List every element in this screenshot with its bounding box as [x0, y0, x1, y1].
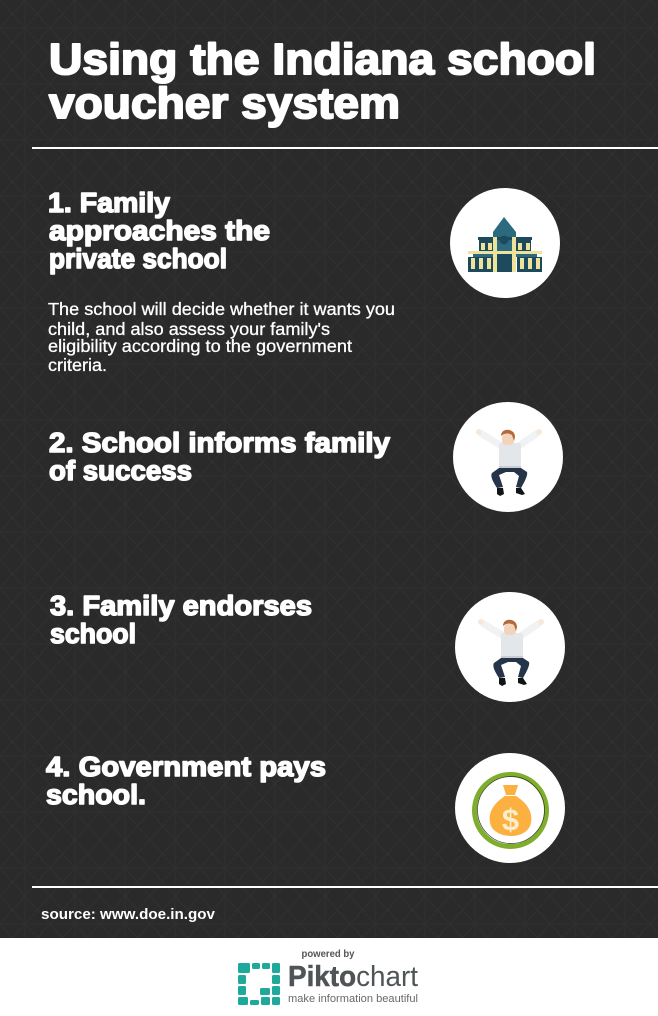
icon: money bag: $ [502, 802, 519, 837]
source: source: www.doe.in.gov [41, 906, 216, 923]
step 2 heading: 2. School informs family [49, 427, 390, 458]
step 1 heading: approaches the [49, 215, 270, 246]
icon: Piktochart logo [238, 963, 280, 1005]
step 1 body text: The school will decide whether it wants you [48, 299, 395, 319]
step 4 heading [46, 751, 326, 810]
icon: cheering person [455, 592, 565, 702]
icon: money bag [455, 753, 565, 863]
icon: cheering person [453, 402, 563, 512]
wordmark: Piktochart [288, 961, 418, 993]
top divider [32, 147, 658, 149]
title: voucher system [49, 79, 400, 128]
bottom divider [32, 886, 658, 888]
step 3 heading: 3. Family endorses [50, 590, 312, 621]
tagline: make information beautiful [288, 993, 418, 1005]
step 1 body text: eligibility according to the government [48, 336, 352, 356]
step 3 heading: school [50, 618, 136, 649]
footer: Piktochart branding [0, 938, 658, 1016]
step 4 heading: school. [46, 779, 146, 810]
title [49, 35, 596, 128]
step 2 heading [49, 427, 390, 486]
step 1 body text: criteria. [48, 355, 107, 375]
step 1 heading [48, 187, 270, 274]
step 1 body text [48, 299, 395, 375]
powered by: powered by [302, 949, 355, 960]
step 1 heading: 1. Family [48, 187, 170, 218]
step 1 body text: child, and also assess your family's [48, 319, 330, 339]
icon: school building [450, 188, 560, 298]
step 1 heading: private school [49, 243, 227, 274]
step 3 heading [50, 590, 312, 649]
step 4 heading: 4. Government pays [46, 751, 326, 782]
step 2 heading: of success [49, 455, 192, 486]
title: Using the Indiana school [49, 35, 596, 84]
